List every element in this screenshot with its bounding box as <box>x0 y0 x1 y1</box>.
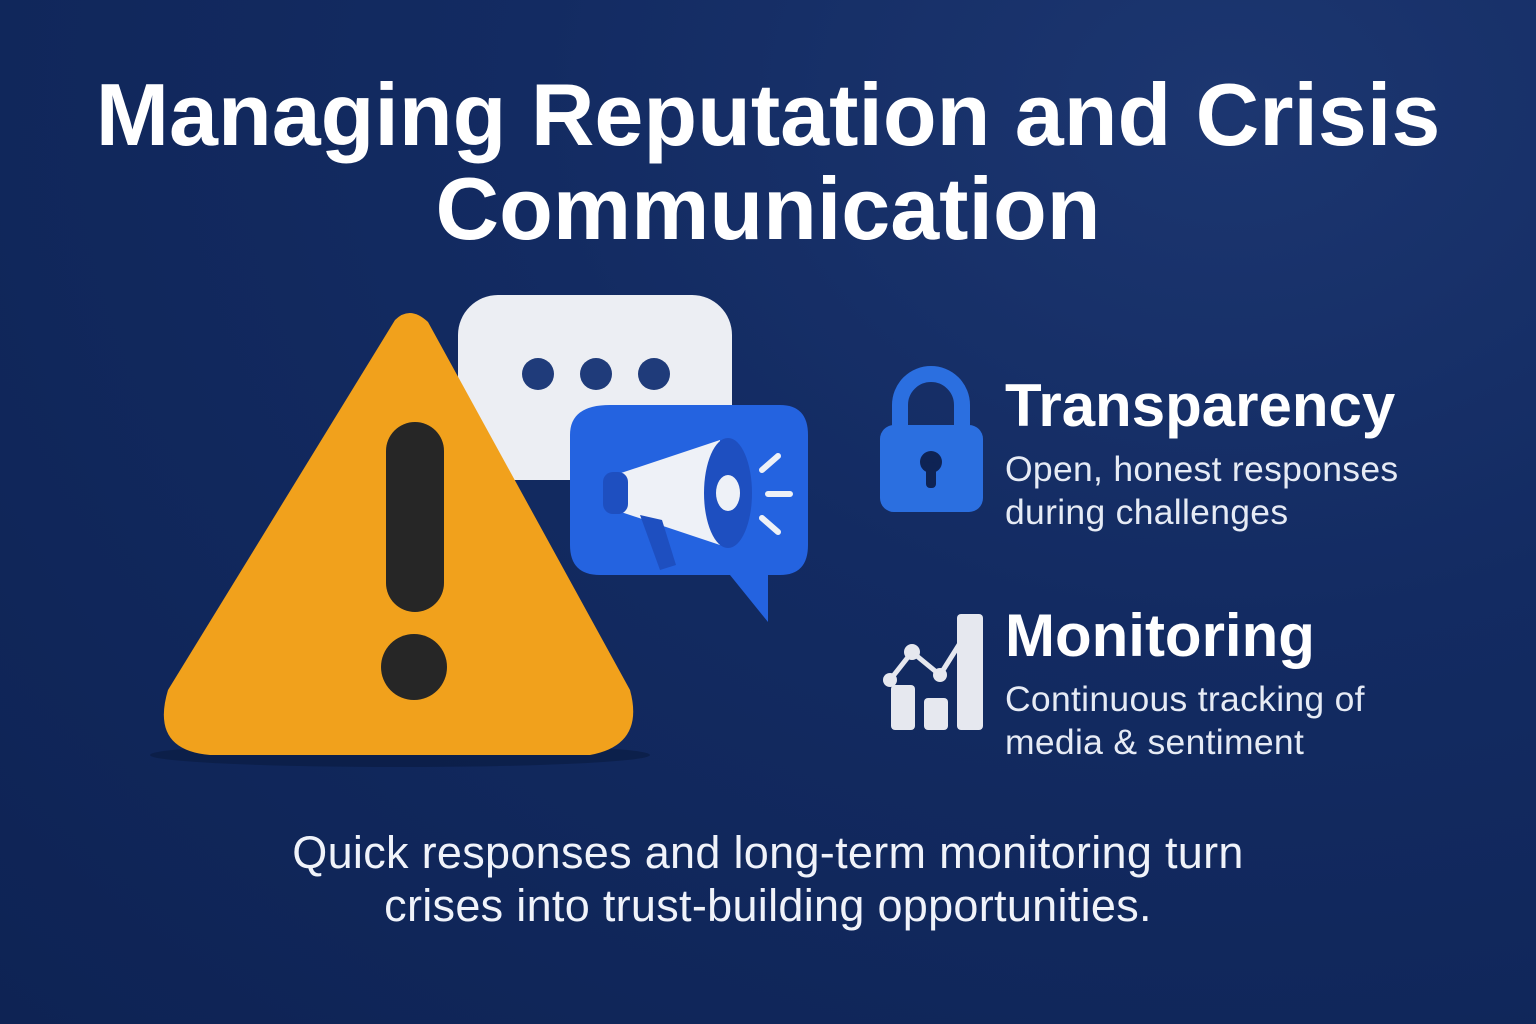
bottom caption: crises into trust-building opportunities. <box>384 880 1152 931</box>
title <box>96 65 1440 258</box>
text: transparency description: Open, honest responses <box>1005 449 1398 489</box>
icon: lock <box>880 374 983 512</box>
text: monitoring description: Continuous tracking of <box>1005 679 1365 719</box>
text: monitoring description: media & sentiment <box>1005 722 1304 762</box>
text: transparency description: during challenges <box>1005 492 1288 532</box>
heading: monitoring: Monitoring <box>1005 602 1315 669</box>
icon: blue megaphone bubble <box>570 405 808 622</box>
icon: white chat bubble <box>458 295 732 480</box>
bottom caption <box>292 827 1244 931</box>
bottom caption: Quick responses and long-term monitoring turn <box>292 827 1244 878</box>
icon: chart <box>883 614 983 730</box>
title: Communication <box>436 159 1100 258</box>
icon: warning triangle <box>150 313 650 767</box>
heading: transparency: Transparency <box>1005 372 1395 439</box>
text: monitoring description <box>1005 679 1365 762</box>
text: transparency description <box>1005 449 1398 532</box>
title: Managing Reputation and Crisis <box>96 65 1440 164</box>
